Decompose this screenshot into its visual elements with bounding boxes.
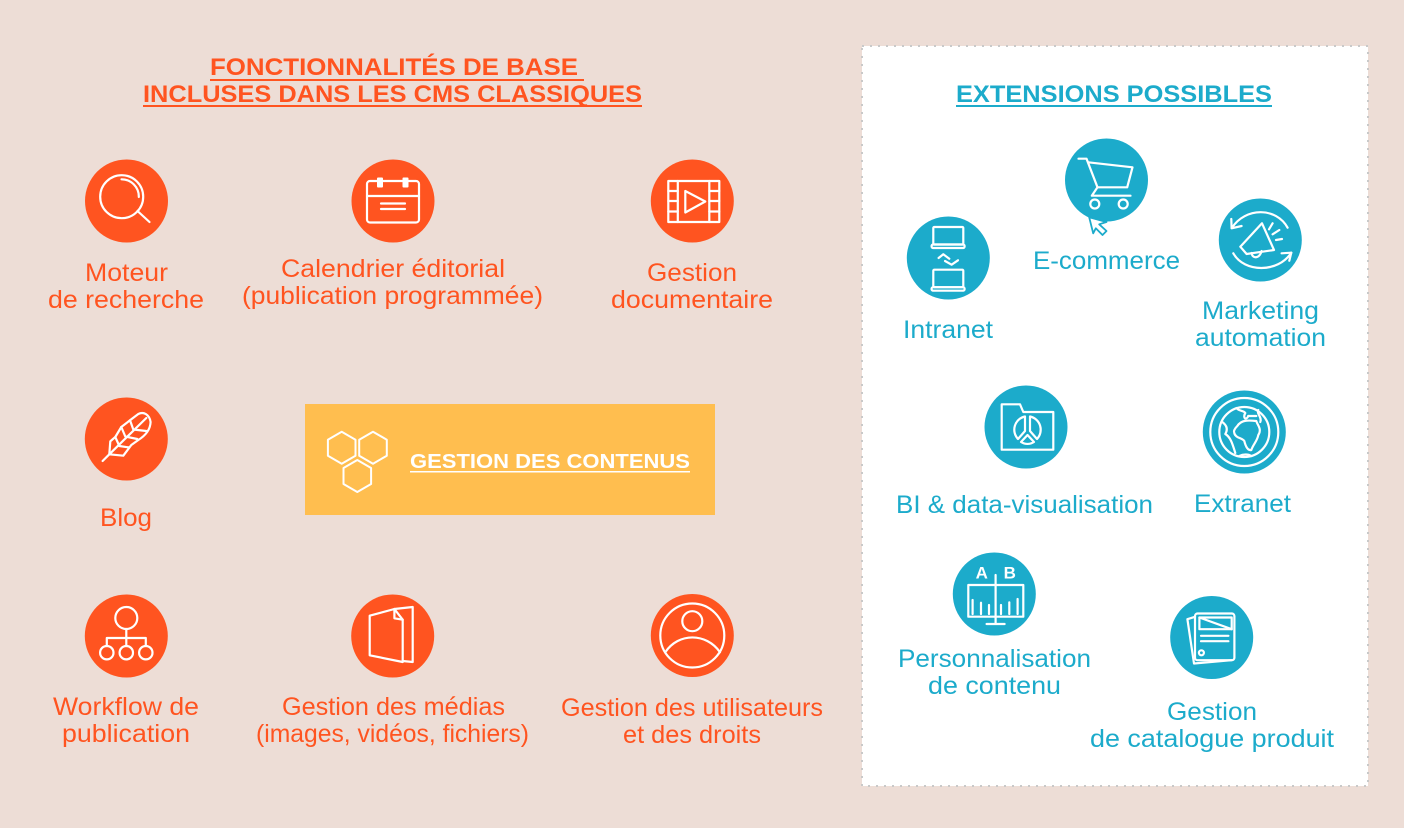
label: users and rights: Gestion des utilisateurs [561,694,823,722]
feature: blog [85,398,168,532]
label: users and rights: et des droits [623,721,761,749]
label: editorial calendar [242,255,543,310]
panel: possible extensions [862,46,1368,786]
extension: content personalisation [898,552,1091,700]
heading: base features: INCLUSES DANS LES CMS CLASSIQUES [143,81,642,108]
label: marketing automation: automation [1195,324,1326,352]
label: search engine: Moteur [85,259,168,287]
feature: publication workflow [53,594,199,748]
extension: intranet [903,216,993,344]
icon: hexagons [328,432,387,492]
label: content personalisation [898,645,1091,700]
extension: product catalogue [1090,596,1334,753]
label: e-commerce: E-commerce [1033,247,1180,275]
label: publication workflow: publication [62,720,190,748]
label: editorial calendar: Calendrier éditorial [281,255,505,283]
label: BI and data visualisation: BI & data-visualisation [896,491,1153,519]
heading: possible extensions: EXTENSIONS POSSIBLES [956,81,1272,108]
banner label: GESTION DES CONTENUS [410,451,690,473]
extension: e-commerce [1033,138,1180,275]
feature: editorial calendar [242,160,543,310]
feature: media management [256,594,529,748]
icon: shopping cart [1065,138,1148,235]
central banner: content management [305,404,715,515]
label: media management: Gestion des médias [282,693,505,721]
icon: magnifying glass [85,160,168,242]
icon: catalogue sheets [1170,596,1253,679]
heading: base features: FONCTIONNALITÉS DE BASE [210,53,578,81]
icon: A/B test screen: A [976,564,988,582]
icon: documents [351,594,434,678]
label: intranet: Intranet [903,316,993,344]
icon: film strip [651,160,734,242]
label: publication workflow [53,693,199,748]
label: marketing automation [1195,297,1326,352]
panel: base features [48,53,823,749]
icon: feather [85,398,168,480]
label: users and rights [561,694,823,749]
label: document management: Gestion [647,259,737,287]
extension: marketing automation [1195,198,1326,352]
label: document management [611,259,773,314]
label: content personalisation: Personnalisation [898,645,1091,673]
extension: extranet [1194,390,1291,518]
label: search engine: de recherche [48,286,204,314]
icon: A/B test screen [953,552,1036,636]
label: media management: (images, vidéos, fichiers) [256,720,529,748]
label: product catalogue: Gestion [1167,698,1257,726]
icon: megaphone with cycle arrows [1219,198,1302,282]
label: editorial calendar: (publication programmée) [242,282,543,310]
label: extranet: Extranet [1194,490,1291,518]
label: product catalogue [1090,698,1334,753]
icon: calendar [352,160,434,242]
icon: connected laptops [907,216,990,300]
feature: document management [611,160,773,314]
icon: globe [1203,390,1286,474]
icon: user [651,594,734,677]
label: search engine [48,259,204,314]
extension: BI and data visualisation [896,386,1153,519]
feature: users and rights [561,594,823,749]
label: marketing automation: Marketing [1202,297,1319,325]
heading: base features [143,53,642,108]
label: publication workflow: Workflow de [53,693,199,721]
label: blog: Blog [100,504,152,532]
label: media management [256,693,529,748]
icon: A/B test screen: B [1004,564,1016,582]
icon: org chart [85,594,168,678]
label: document management: documentaire [611,286,773,314]
icon: folder with pie chart [984,386,1068,468]
label: product catalogue: de catalogue produit [1090,725,1334,753]
feature: search engine [48,160,204,314]
label: content personalisation: de contenu [928,672,1061,700]
